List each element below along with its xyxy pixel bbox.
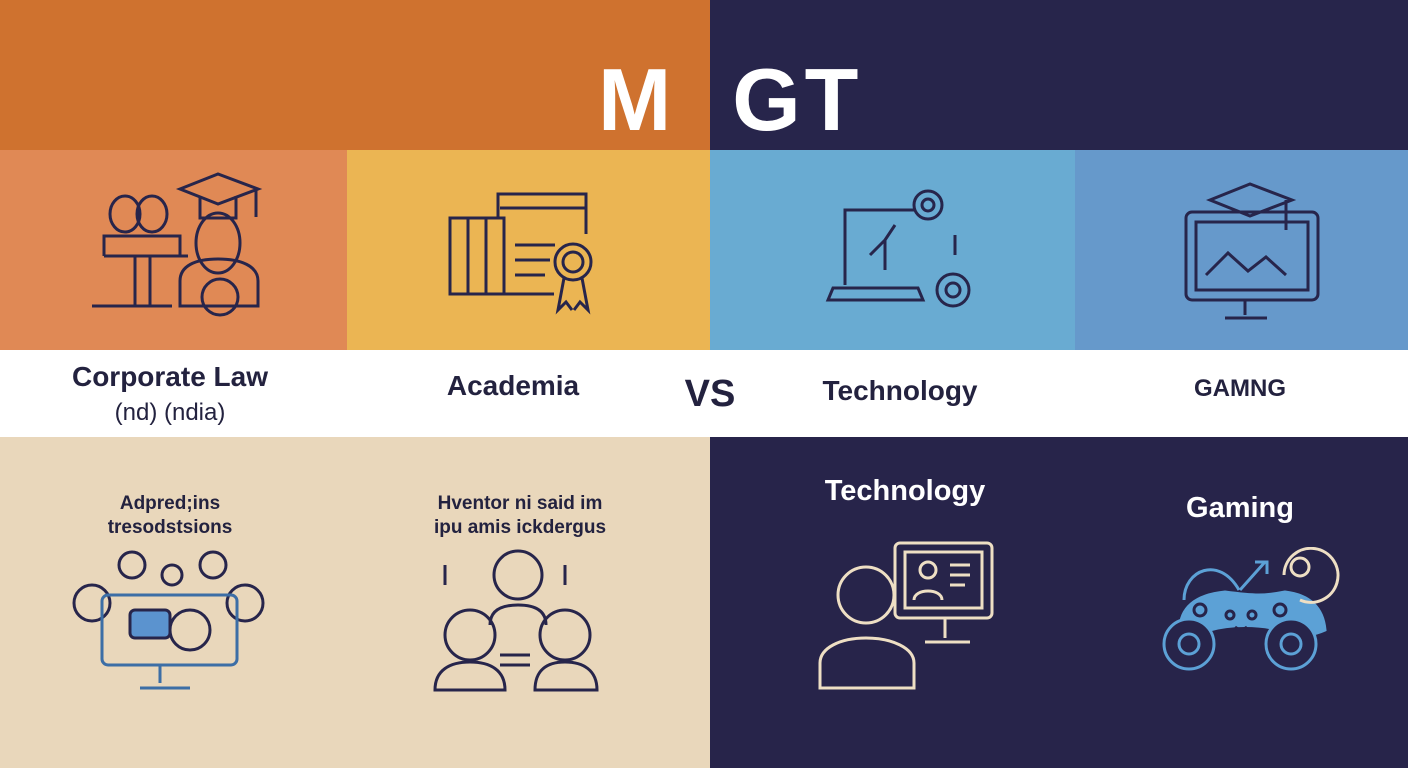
label: corporate law: (nd) (ndia) (115, 399, 225, 426)
text: caption 2 (434, 493, 606, 538)
heading: technology: Technology (825, 475, 985, 507)
top band left (0, 0, 710, 150)
panel: gaming top (1075, 150, 1408, 350)
label: corporate law (72, 361, 268, 426)
icon: person with monitor (818, 542, 994, 690)
icon: people with graduate (92, 172, 262, 316)
text: caption 2: Hventor ni said im (438, 493, 602, 514)
top band right (710, 0, 1408, 150)
icon: monitor with cap (1184, 182, 1320, 320)
icon: three people (434, 550, 598, 692)
icon: game controller (1162, 547, 1340, 670)
panel: bottom right (710, 437, 1408, 768)
panel: bottom left (0, 437, 710, 768)
text: caption 1: tresodstsions (108, 517, 232, 538)
text: caption 1 (108, 493, 232, 538)
label: gaming: GAMNG (1194, 375, 1286, 402)
icon: books and certificate (448, 192, 592, 314)
heading: gaming: Gaming (1186, 492, 1294, 524)
text: caption 1: Adpred;ins (120, 493, 220, 514)
label: vs: VS (685, 373, 735, 415)
text: caption 2: ipu amis ickdergus (434, 517, 606, 538)
icon: laptop with gears (826, 190, 970, 308)
label: corporate law: Corporate Law (72, 361, 268, 392)
panel: academia (347, 150, 710, 350)
icon: network monitor (72, 550, 264, 690)
label: technology: Technology (822, 375, 978, 406)
panel: technology top (710, 150, 1075, 350)
title: M GT (598, 50, 862, 149)
panel: corporate law (0, 150, 347, 350)
label: academia: Academia (447, 370, 579, 401)
